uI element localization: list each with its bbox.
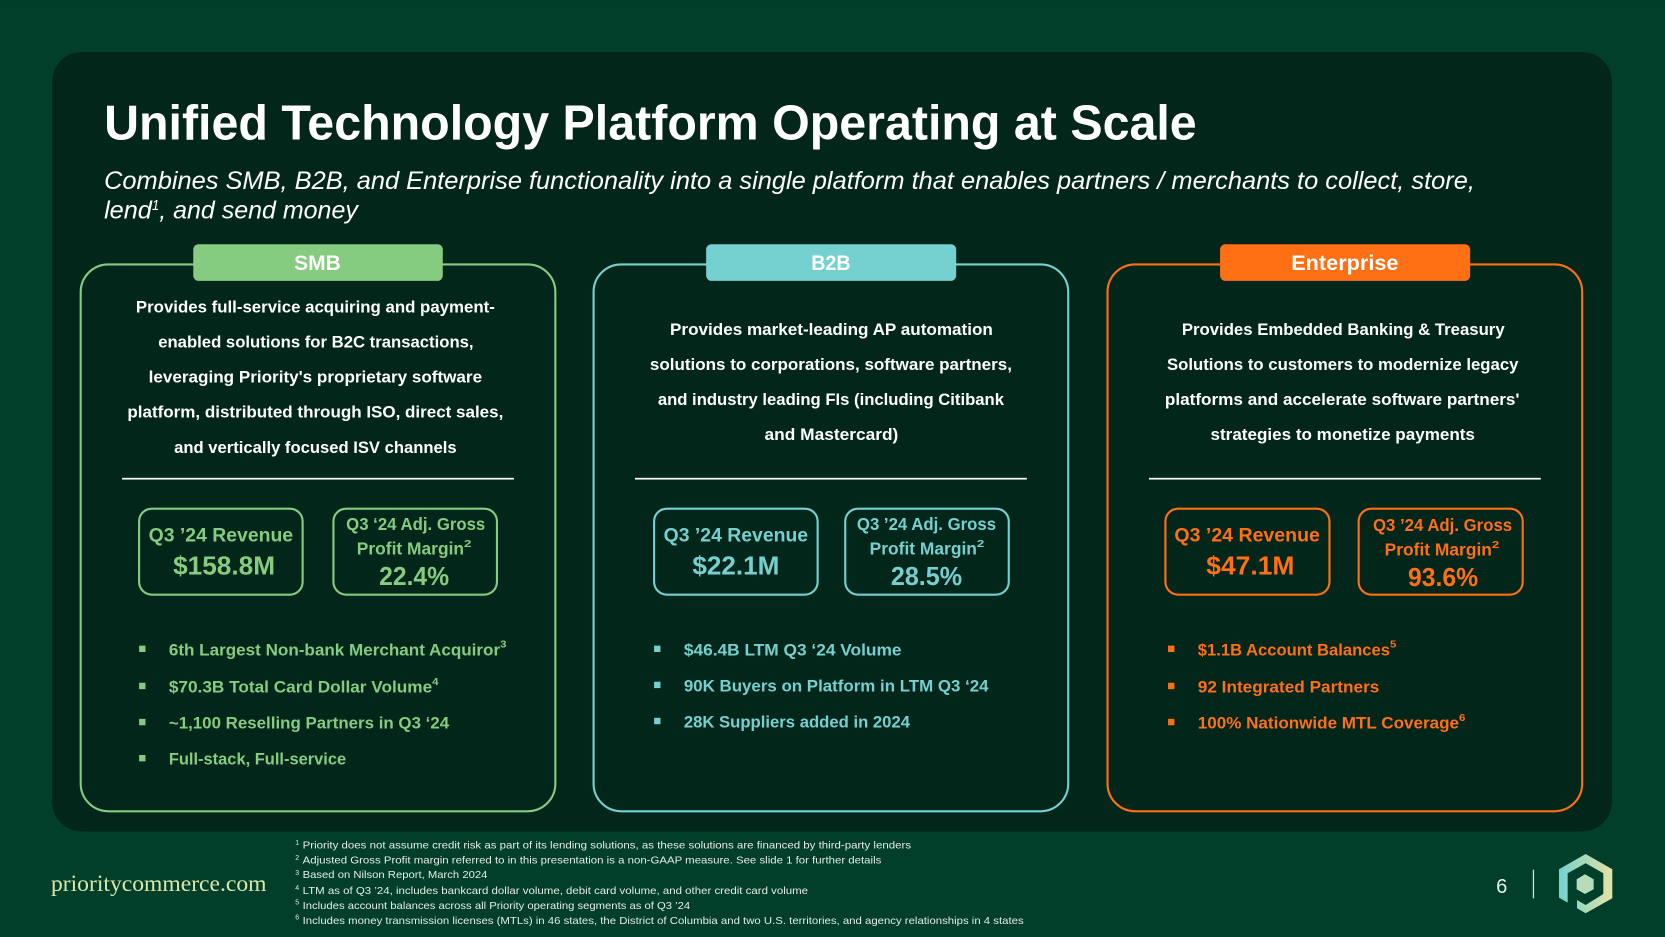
- subtitle: , and send money: [159, 197, 359, 225]
- SMB margin box: 22.4%: [379, 563, 449, 591]
- website address: prioritycommerce.com: [51, 871, 267, 896]
- B2B description: solutions to corporations, software partners,: [650, 355, 1012, 374]
- title: Unified Technology Platform Operating at Scale: [104, 97, 1197, 151]
- panel: B2B: [594, 244, 1068, 811]
- subtitle: [104, 167, 1475, 225]
- B2B revenue box: $22.1M: [692, 552, 779, 580]
- SMB margin box: [333, 509, 497, 595]
- B2B bullets: 28K Suppliers added in 2024: [684, 712, 911, 731]
- footnotes: 6: [295, 915, 299, 922]
- Enterprise description: Provides Embedded Banking & Treasury: [1182, 320, 1505, 339]
- Enterprise bullets: 100% Nationwide MTL Coverage: [1198, 713, 1459, 732]
- B2B tab: [706, 244, 956, 281]
- SMB revenue box: $158.8M: [173, 552, 275, 580]
- B2B bullets: 90K Buyers on Platform in LTM Q3 ‘24: [684, 676, 989, 695]
- Enterprise margin box: [1359, 509, 1523, 595]
- SMB bullets: [139, 640, 507, 769]
- Enterprise bullets: $1.1B Account Balances: [1198, 641, 1390, 660]
- Enterprise description: [1165, 320, 1520, 444]
- Enterprise revenue box: $47.1M: [1206, 552, 1294, 580]
- SMB tab: SMB: [294, 252, 341, 275]
- B2B margin box: Q3 ’24 Adj. Gross: [857, 514, 996, 534]
- SMB description: Provides full-service acquiring and payment-: [136, 298, 495, 317]
- footnotes: Priority does not assume credit risk as part of its lending solutions, as these solutions are financed by third-party lenders: [303, 840, 911, 851]
- Enterprise margin box: 2: [1492, 540, 1500, 551]
- B2B margin box: 28.5%: [891, 563, 962, 591]
- Enterprise bullets: 5: [1390, 640, 1397, 651]
- footnotes: 1: [295, 840, 299, 847]
- SMB revenue box: [139, 509, 303, 595]
- B2B margin box: Profit Margin: [870, 538, 977, 558]
- icon: Priority logo: [1559, 854, 1612, 913]
- footnotes: Includes account balances across all Priority operating segments as of Q3 ’24: [303, 901, 691, 912]
- footnotes: Includes money transmission licenses (MTLs) in 46 states, the District of Columbia and two U.S. territories, and agency relationships in 4 states: [303, 916, 1024, 927]
- footnotes: 2: [295, 855, 299, 862]
- B2B tab: B2B: [811, 252, 851, 275]
- Enterprise tab: Enterprise: [1291, 252, 1399, 275]
- Enterprise revenue box: [1165, 509, 1329, 595]
- SMB margin box: 2: [464, 539, 472, 550]
- panel: Enterprise: [1108, 244, 1582, 811]
- Enterprise bullets: 6: [1459, 713, 1466, 724]
- panel: SMB: [81, 244, 555, 811]
- SMB description: [127, 298, 503, 457]
- SMB bullets: 3: [500, 640, 507, 651]
- footnotes: Adjusted Gross Profit margin referred to in this presentation is a non-GAAP measure. See slide 1 for further details: [303, 855, 881, 866]
- B2B margin box: [845, 509, 1009, 595]
- SMB bullets: 6th Largest Non-bank Merchant Acquiror: [169, 641, 501, 660]
- SMB description: and vertically focused ISV channels: [174, 438, 457, 457]
- Enterprise bullets: 92 Integrated Partners: [1198, 677, 1379, 696]
- SMB bullets: ~1,100 Reselling Partners in Q3 ‘24: [169, 713, 450, 732]
- SMB tab: [193, 244, 443, 281]
- subtitle: 1: [152, 198, 159, 214]
- B2B revenue box: [654, 509, 818, 595]
- SMB description: platform, distributed through ISO, direct sales,: [127, 403, 503, 422]
- B2B description: and industry leading FIs (including Citibank: [658, 390, 1005, 409]
- SMB description: leveraging Priority's proprietary software: [149, 368, 482, 387]
- main dark panel: [52, 52, 1612, 831]
- SMB bullets: Full-stack, Full-service: [169, 750, 346, 769]
- footnotes: 5: [295, 900, 299, 907]
- Enterprise tab: [1220, 244, 1470, 281]
- footnotes: Based on Nilson Report, March 2024: [303, 870, 488, 881]
- Enterprise description: strategies to monetize payments: [1211, 425, 1475, 444]
- Enterprise description: platforms and accelerate software partners': [1165, 390, 1520, 409]
- SMB description: enabled solutions for B2C transactions,: [158, 333, 474, 352]
- Enterprise bullets: [1168, 640, 1466, 732]
- Enterprise margin box: Profit Margin: [1385, 539, 1492, 559]
- subtitle: Combines SMB, B2B, and Enterprise functionality into a single platform that enables partners / merchants to collect, store,: [104, 167, 1475, 195]
- B2B description: Provides market-leading AP automation: [670, 320, 993, 339]
- Enterprise revenue box: Q3 ’24 Revenue: [1174, 525, 1320, 547]
- B2B bullets: $46.4B LTM Q3 ‘24 Volume: [684, 641, 902, 660]
- SMB bullets: $70.3B Total Card Dollar Volume: [169, 677, 432, 696]
- B2B description: [650, 320, 1012, 444]
- B2B bullets: [654, 641, 989, 731]
- B2B description: and Mastercard): [765, 425, 898, 444]
- subtitle: lend: [104, 197, 153, 225]
- footnotes: LTM as of Q3 ’24, includes bankcard dollar volume, debit card volume, and other credit card volume: [303, 886, 809, 897]
- SMB margin box: Q3 ‘24 Adj. Gross: [346, 514, 486, 534]
- Enterprise margin box: Q3 ’24 Adj. Gross: [1373, 515, 1512, 535]
- Enterprise margin box: 93.6%: [1408, 564, 1478, 592]
- B2B revenue box: Q3 ’24 Revenue: [664, 525, 808, 547]
- footnotes: [295, 840, 1024, 927]
- SMB revenue box: Q3 ’24 Revenue: [149, 525, 293, 547]
- footnotes: 4: [295, 885, 299, 892]
- page number: 6: [1496, 876, 1507, 898]
- Enterprise description: Solutions to customers to modernize legacy: [1167, 355, 1519, 374]
- SMB bullets: 4: [432, 677, 439, 688]
- B2B margin box: 2: [977, 539, 985, 550]
- footnotes: 3: [295, 870, 299, 877]
- SMB margin box: Profit Margin: [357, 538, 464, 558]
